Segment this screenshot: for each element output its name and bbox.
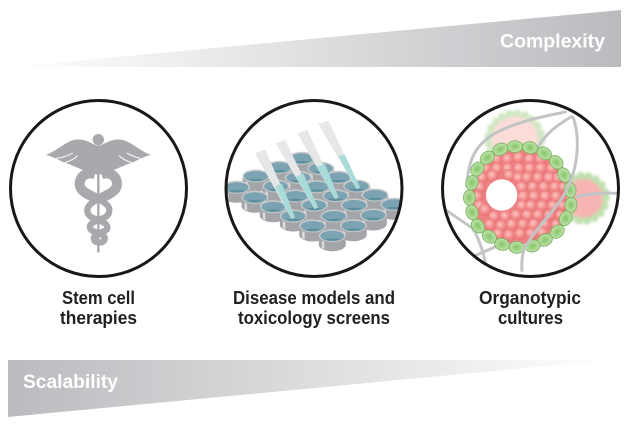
icon: organoid	[447, 112, 617, 272]
panel: organotypic cultures	[442, 100, 618, 328]
panel: stem cell therapies	[10, 100, 186, 328]
icon: pipettes	[255, 121, 360, 219]
scalability label: Scalability	[23, 372, 118, 393]
label: therapies	[60, 308, 137, 328]
label: toxicology screens	[238, 308, 390, 328]
icon: caduceus	[46, 134, 151, 252]
ring	[442, 100, 618, 276]
complexity wedge	[10, 10, 621, 67]
icon: well plate	[223, 152, 408, 251]
ring	[10, 100, 186, 276]
label: Disease models and	[233, 288, 395, 308]
ring	[226, 100, 402, 276]
label: Organotypic	[479, 288, 581, 308]
complexity label: Complexity	[500, 32, 605, 52]
label: Stem cell	[62, 288, 135, 308]
label: cultures	[498, 308, 563, 328]
panel: disease models	[223, 100, 408, 328]
scalability wedge	[8, 360, 610, 417]
